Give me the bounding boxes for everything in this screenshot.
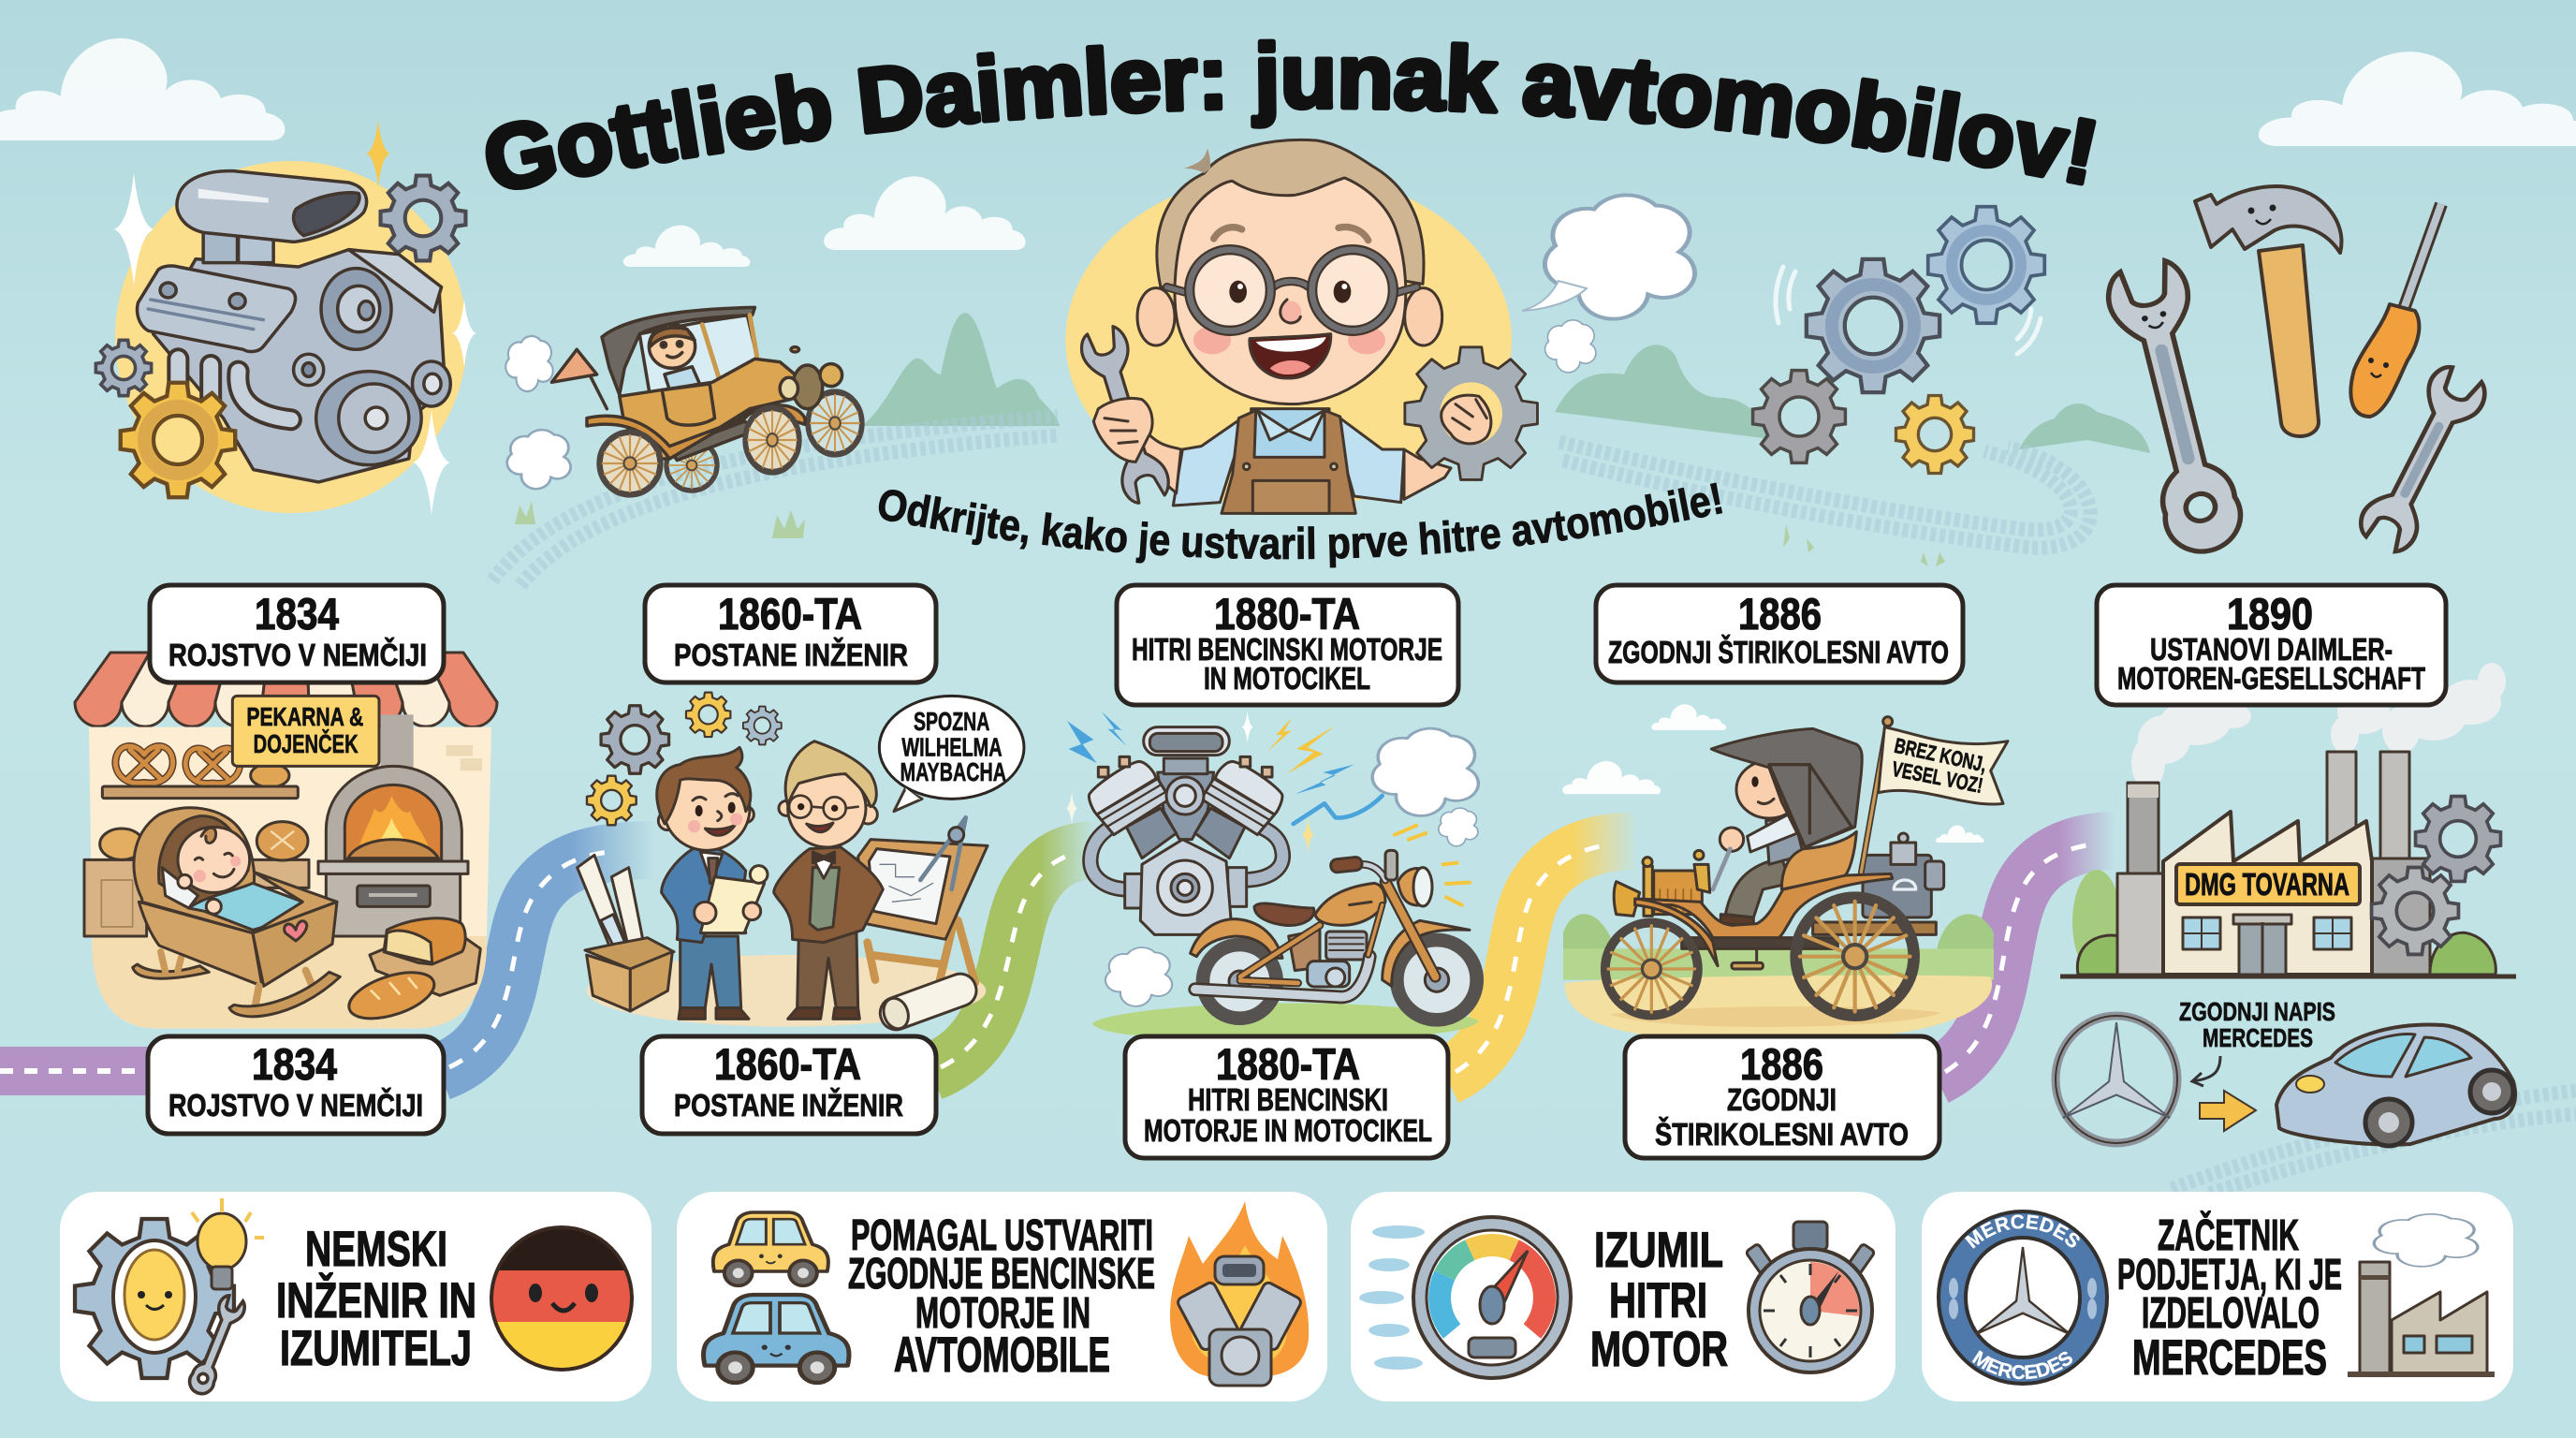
sign bbox=[232, 696, 379, 766]
timeline label: 1860-ta bottom: POSTANE INŽENIR bbox=[674, 1088, 903, 1123]
gears cluster bbox=[1753, 207, 2044, 473]
glasses bbox=[1167, 250, 1416, 330]
motorcycle bbox=[1191, 850, 1477, 1020]
grass tufts bbox=[515, 501, 1945, 566]
card: petrol engines and cars bbox=[677, 1192, 1327, 1401]
cloud: small by car bbox=[623, 226, 751, 267]
flag: VESEL VOZ! bbox=[1890, 756, 1985, 798]
bushes bbox=[2072, 870, 2496, 975]
timeline label: 1880-ta bottom: HITRI BENCINSKI bbox=[1188, 1082, 1388, 1117]
oven bbox=[318, 766, 468, 936]
counters and loaves bbox=[84, 822, 309, 936]
caption: MERCEDES bbox=[2203, 1023, 2313, 1052]
text bbox=[276, 1222, 476, 1376]
panel: bakery and baby bbox=[75, 653, 497, 1028]
cloud: top right bbox=[2259, 51, 2576, 146]
modern car bbox=[2276, 1025, 2515, 1146]
icon: yellow car bbox=[713, 1212, 828, 1285]
road: yellow bbox=[1446, 841, 1638, 1077]
text bbox=[848, 1211, 1155, 1383]
timeline label: 1886 top bbox=[1596, 585, 1963, 682]
timeline label: 1880-ta top: 1880-TA bbox=[1214, 589, 1360, 638]
lightning and sparkles bbox=[1066, 711, 1354, 852]
panel: engine and motorcycle bbox=[1066, 711, 1479, 1039]
text bbox=[1590, 1223, 1728, 1377]
canopy bbox=[1711, 728, 1862, 847]
subtitle: Odkrijte, kako je ustvaril prve hitre avtomobile! bbox=[878, 483, 1722, 567]
gears bbox=[587, 693, 782, 825]
cradle with baby bbox=[133, 808, 340, 1017]
timeline label: 1880-ta bottom: 1880-TA bbox=[1216, 1039, 1360, 1089]
cloud: small centre left bbox=[824, 176, 1026, 250]
small pointer bbox=[2192, 1056, 2220, 1086]
V-engine bbox=[1089, 727, 1282, 934]
road: purple bbox=[1936, 841, 2117, 1077]
text: IZUMIL bbox=[1594, 1223, 1723, 1278]
text: MOTORJE IN bbox=[915, 1288, 1090, 1337]
timeline label: 1860-ta bottom bbox=[642, 1036, 936, 1134]
shirt and arms bbox=[1133, 409, 1451, 513]
factory sign: DMG TOVARNA bbox=[2185, 867, 2349, 902]
icon: screwdriver bbox=[2350, 204, 2441, 417]
hair bbox=[1157, 139, 1424, 287]
hills bbox=[862, 313, 2150, 453]
sign: DOJENČEK bbox=[254, 728, 359, 758]
timeline label: 1834 bottom bbox=[148, 1036, 444, 1134]
clouds bbox=[1562, 704, 1984, 843]
text: AVTOMOBILE bbox=[894, 1328, 1110, 1383]
wrench in hand bbox=[1077, 324, 1173, 506]
text: PODJETJA, KI JE bbox=[2117, 1250, 2342, 1299]
caption: ZGODNJI NAPIS bbox=[2179, 997, 2335, 1026]
text: ZAČETNIK bbox=[2158, 1211, 2299, 1259]
blueprint rolls and box bbox=[578, 855, 981, 1034]
illustration: engine with gears bbox=[95, 120, 476, 515]
timeline label: 1834 top: ROJSTVO V NEMČIJI bbox=[168, 637, 427, 672]
timeline label: 1834 top: 1834 bbox=[255, 589, 339, 638]
tire tracks: left bbox=[492, 417, 1058, 585]
speech bubble: WILHELMA bbox=[901, 732, 1003, 761]
easel bbox=[858, 817, 988, 983]
chimney and bricks bbox=[381, 714, 482, 770]
shelf and pretzels bbox=[102, 746, 298, 799]
icon: large wrench bbox=[2102, 257, 2250, 560]
chimneys and wings bbox=[2117, 752, 2430, 975]
flag: BREZ KONJ, bbox=[1893, 733, 1989, 777]
timeline label: 1886 top: 1886 bbox=[1738, 589, 1822, 638]
icon: German flag face bbox=[490, 1225, 634, 1372]
timeline label: 1834 top bbox=[150, 585, 444, 682]
card: German engineer bbox=[60, 1192, 651, 1401]
face bbox=[1175, 178, 1406, 404]
timeline label: 1834 bottom: 1834 bbox=[252, 1039, 337, 1089]
caption bbox=[2179, 997, 2335, 1052]
road: green bbox=[931, 850, 1097, 1072]
shop wall and floor bbox=[89, 727, 491, 1028]
timeline label: 1860-ta bottom: 1860-TA bbox=[714, 1039, 861, 1089]
icon: Mercedes badge bbox=[1937, 1210, 2109, 1386]
card: Mercedes company bbox=[1922, 1192, 2513, 1401]
text: IZUMITELJ bbox=[280, 1321, 472, 1376]
timeline label: 1890 top: MOTOREN-GESELLSCHAFT bbox=[2117, 661, 2425, 696]
carriage wheels bbox=[1605, 922, 1698, 1015]
bushes and ground bbox=[1563, 914, 1994, 1036]
gear in hand bbox=[1405, 347, 1537, 479]
timeline label: 1890 top bbox=[2097, 585, 2446, 705]
person: brown suit engineer bbox=[774, 741, 883, 1019]
speech bubble: MAYBACHA bbox=[900, 757, 1006, 786]
flag bbox=[1861, 717, 2008, 873]
gears bbox=[2372, 797, 2500, 954]
text: INŽENIR IN bbox=[276, 1271, 476, 1328]
tire tracks: right bbox=[1559, 442, 2576, 1194]
timeline label: 1880-ta top: IN MOTOCIKEL bbox=[1204, 661, 1370, 696]
timeline label: 1834 bottom: ROJSTVO V NEMČIJI bbox=[168, 1087, 423, 1123]
hand bbox=[1093, 398, 1152, 462]
main building bbox=[2163, 812, 2372, 975]
awning bbox=[75, 653, 497, 727]
icon: Mercedes badge: MERCEDES bbox=[1971, 1350, 2072, 1380]
text: ZGODNJE BENCINSKE bbox=[848, 1249, 1155, 1298]
title: Gottlieb Daimler: junak avtomobilov! bbox=[485, 39, 2097, 190]
text: MERCEDES bbox=[2132, 1330, 2327, 1386]
road: blue bbox=[440, 850, 655, 1072]
ears bbox=[1137, 288, 1442, 345]
speech bubble bbox=[879, 696, 1024, 812]
timeline label: 1886 top: ZGODNJI ŠTIRIKOLESNI AVTO bbox=[1608, 634, 1949, 669]
icon: engine on fire bbox=[1170, 1201, 1309, 1386]
panel: Mercedes logo and car bbox=[2056, 997, 2515, 1146]
illustration: vintage car driving bbox=[505, 307, 863, 495]
panel: engineers meeting bbox=[578, 693, 1024, 1034]
text: IZDELOVALO bbox=[2142, 1288, 2320, 1337]
logo bbox=[2056, 1016, 2177, 1143]
sign: PEKARNA & bbox=[246, 702, 363, 731]
timeline label: 1880-ta bottom bbox=[1125, 1036, 1448, 1158]
card: fast engine bbox=[1351, 1192, 1895, 1401]
rear engine bbox=[1863, 833, 1944, 917]
mouth bbox=[1250, 334, 1331, 378]
timeline label: 1880-ta bottom: MOTORJE IN MOTOCIKEL bbox=[1144, 1113, 1432, 1148]
tools bbox=[2102, 186, 2491, 560]
timeline label: 1860-ta top: POSTANE INŽENIR bbox=[674, 638, 908, 672]
icon: blue car bbox=[703, 1295, 849, 1383]
icon: speedometer bbox=[1359, 1217, 1571, 1378]
timeline label: 1890 top: 1890 bbox=[2227, 589, 2313, 638]
factory sign bbox=[2176, 864, 2360, 904]
carriage chassis and body bbox=[1614, 831, 1936, 969]
icon: factory with smoke bbox=[2348, 1214, 2495, 1374]
timeline label: 1880-ta top: HITRI BENCINSKI MOTORJE bbox=[1132, 632, 1442, 667]
timeline label: 1890 top: USTANOVI DAIMLER- bbox=[2150, 632, 2393, 667]
timeline label: 1886 bottom bbox=[1625, 1036, 1939, 1158]
timeline label: 1860-ta top bbox=[645, 585, 936, 682]
timeline label: 1860-ta top: 1860-TA bbox=[718, 589, 862, 638]
road: purple start bbox=[0, 1047, 159, 1095]
text: NEMSKI bbox=[305, 1222, 447, 1277]
panel: horseless carriage bbox=[1562, 704, 2008, 1036]
text: MOTOR bbox=[1590, 1322, 1728, 1377]
timeline label: 1886 bottom: 1886 bbox=[1740, 1039, 1823, 1089]
smoke bbox=[2131, 663, 2506, 789]
panel: DMG factory bbox=[2060, 663, 2516, 976]
icon: Mercedes badge: MERCEDES bbox=[1965, 1214, 2080, 1249]
yellow arrow bbox=[2200, 1091, 2256, 1131]
cloud: top left bbox=[0, 38, 285, 140]
icon: hammer bbox=[2195, 186, 2341, 436]
speech bubble: SPOZNA bbox=[914, 707, 990, 736]
icon: stopwatch bbox=[1746, 1222, 1875, 1372]
driver bbox=[1713, 761, 1804, 925]
text: POMAGAL USTVARITI bbox=[851, 1211, 1153, 1259]
cloud left of motorcycle bbox=[1105, 947, 1172, 1006]
breads bbox=[344, 918, 480, 1028]
timeline label: 1886 bottom: ŠTIRIKOLESNI AVTO bbox=[1655, 1116, 1909, 1152]
timeline label: 1880-ta top bbox=[1117, 585, 1458, 705]
timeline label: 1886 bottom: ZGODNJI bbox=[1727, 1082, 1837, 1117]
text: HITRI bbox=[1609, 1273, 1707, 1328]
icon: small wrench bbox=[2354, 361, 2491, 556]
speech clouds by professor bbox=[1522, 195, 1695, 373]
text bbox=[2117, 1211, 2342, 1386]
door and windows bbox=[2183, 915, 2351, 975]
illustration: professor Daimler with wrench and gear bbox=[1065, 139, 1537, 513]
icon: gear with bulb and wrench bbox=[75, 1198, 264, 1398]
clouds above motorcycle bbox=[1372, 728, 1478, 846]
person: blue suit engineer bbox=[657, 747, 768, 1019]
